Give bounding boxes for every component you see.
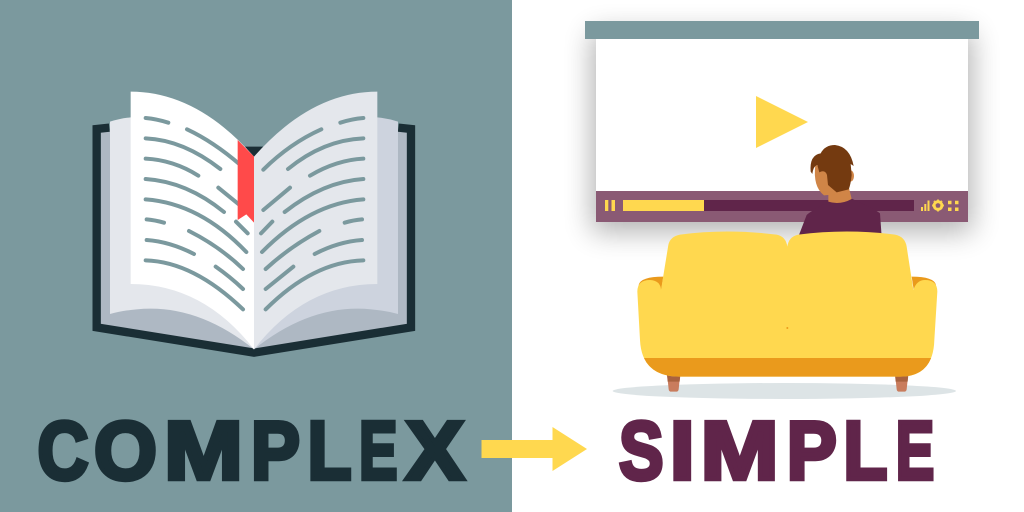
screen surface (596, 39, 968, 191)
heading: simple: E (896, 404, 934, 497)
icon: fullscreen (948, 201, 958, 211)
heading: complex: C (38, 404, 88, 497)
heading: simple: M (701, 404, 779, 497)
left page text lines (146, 118, 248, 309)
shirt (798, 199, 882, 237)
control bar background (596, 191, 968, 222)
video screen (585, 21, 979, 232)
sofa base (644, 358, 931, 377)
right page text lines (261, 118, 363, 309)
arm backs (639, 277, 936, 292)
bookmark ribbon (238, 140, 254, 223)
sofa body (637, 231, 937, 377)
icon: volume bars (921, 200, 930, 211)
heading: complex: O (94, 404, 157, 497)
screen top bar (585, 21, 979, 39)
panel: simple background (512, 0, 1024, 512)
arrow (482, 427, 587, 471)
icon: open book (97, 92, 411, 353)
heading: simple: L (843, 404, 887, 497)
progress fill (623, 200, 704, 211)
person watching (798, 145, 882, 237)
sofa (613, 231, 956, 399)
book cover (97, 128, 411, 353)
right page (254, 92, 377, 349)
heading: complex: M (164, 404, 243, 497)
cover spine top (245, 147, 263, 158)
heading: complex: P (251, 404, 300, 497)
heading: simple: S (619, 404, 664, 497)
right under pages (254, 117, 398, 349)
left page (131, 92, 254, 349)
right leg (895, 373, 908, 392)
floor shadow (613, 383, 956, 399)
neck (828, 187, 852, 203)
inner cover (101, 130, 407, 349)
heading: complex: E (359, 404, 398, 497)
icon: play triangle (756, 96, 808, 148)
progress track (623, 200, 914, 211)
left leg (667, 373, 680, 392)
center dot (786, 327, 788, 329)
icon: pause (605, 200, 615, 211)
heading: complex: L (308, 404, 352, 497)
video control bar (596, 191, 968, 222)
leg shade (667, 375, 908, 382)
panel: complex background (0, 0, 512, 512)
ear (847, 170, 854, 182)
heading: simple: I (670, 404, 695, 497)
icon: gear (932, 200, 944, 212)
head (815, 165, 850, 195)
hair (811, 145, 854, 192)
heading: simple: P (787, 404, 837, 497)
heading: complex: X (406, 404, 464, 497)
screen shadow (592, 32, 972, 232)
left under pages (110, 117, 254, 349)
